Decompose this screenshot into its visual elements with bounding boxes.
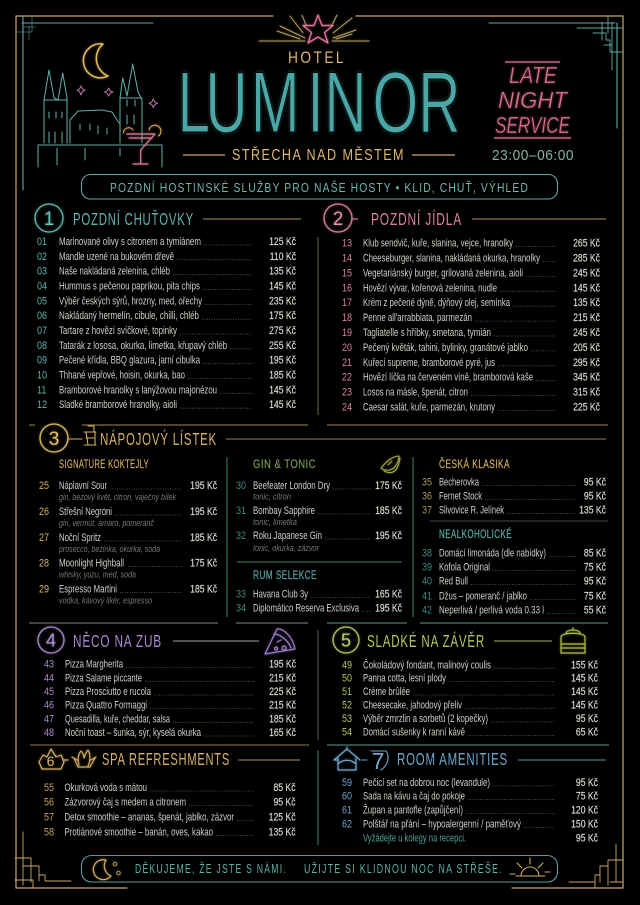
menu list: Župan a pantofle (zapůjčení): [363, 804, 463, 817]
column: czech classics and soft drinks: 41: [422, 591, 432, 603]
menu list: 145 Kč: [269, 281, 296, 293]
menu list: Čokoládový fondant, malinový coulis: [363, 658, 491, 671]
menu list: Výběr českých sýrů, hrozny, med, ořechy: [59, 295, 202, 307]
title: Luminor: LUMINOR: [177, 54, 460, 151]
menu list: Hovězí vývar, kořenová zelenina, nudle: [363, 282, 497, 294]
menu list: 47: [44, 714, 54, 726]
menu list: Hummus s pečenou paprikou, pita chips: [59, 280, 200, 292]
heading: POZDNÍ JÍDLA: [371, 209, 462, 229]
menu list: Naše nakládaná zelenina, chléb: [59, 266, 170, 278]
menu list: [342, 238, 600, 414]
subheading: ČESKÁ KLASIKA: [439, 456, 510, 471]
menu list: Kuřecí supreme, bramborové pyré, jus: [363, 357, 495, 369]
heading: ROOM AMENITIES: [397, 749, 508, 769]
menu list: 215 Kč: [573, 312, 600, 324]
menu list: [44, 659, 296, 739]
section number 5: [333, 627, 359, 653]
column: gin and rum: tonic, limetka: [253, 516, 297, 527]
menu list: 195 Kč: [269, 659, 296, 671]
menu list: Pečicí set na dobrou noc (levandule): [363, 777, 490, 789]
column: gin and rum: 195 Kč: [375, 603, 402, 615]
column: gin and rum: 30: [236, 480, 246, 492]
menu list: 275 Kč: [269, 325, 296, 337]
column: czech classics and soft drinks: 95 Kč: [584, 477, 606, 489]
menu list: 85 Kč: [273, 782, 296, 794]
late night service sign: SERVICE: [495, 112, 570, 138]
icon: house: [334, 747, 360, 770]
menu list: 175 Kč: [269, 310, 296, 323]
menu list: 19: [342, 327, 352, 339]
footer banner: UŽIJTE SI KLIDNOU NOC NA STŘEŠE.: [304, 861, 503, 876]
column: signature cocktails: vodka, kávový likér, espresso: [59, 594, 152, 606]
title: hotel: HOTEL: [288, 48, 346, 67]
late night service sign: LATE: [509, 62, 558, 88]
menu list: 145 Kč: [573, 282, 600, 295]
menu list: 02: [37, 251, 47, 263]
menu list: 11: [37, 385, 47, 397]
menu list: Polštář na přání – hypoalergenní / paměťový: [363, 819, 521, 831]
icon: pizza slice: [265, 629, 295, 654]
menu list: 155 Kč: [571, 659, 598, 672]
heading: SPA REFRESHMENTS: [102, 749, 230, 769]
column: gin and rum: 33: [236, 589, 246, 601]
column: czech classics and soft drinks: 35: [422, 477, 432, 489]
menu list: 08: [37, 340, 47, 352]
menu list: Zázvorový čaj s medem a citronem: [64, 797, 186, 809]
column: czech classics and soft drinks: 37: [422, 505, 432, 517]
menu list: 195 Kč: [269, 355, 296, 367]
intro banner: [82, 174, 558, 199]
icon: cocktail: [123, 125, 161, 164]
menu list: Pizza Salame piccante: [65, 672, 142, 684]
heading: NĚCO NA ZUB: [73, 631, 162, 651]
menu list: Sada na kávu a čaj do pokoje: [363, 791, 465, 803]
menu list: 61: [342, 805, 352, 817]
menu list: 62: [342, 819, 352, 831]
menu list: Cheeseburger, slanina, nakládaná okurka, hranolky: [363, 252, 540, 264]
menu list: Sladké bramborové hranolky, aioli: [59, 399, 177, 411]
panel: 5 sladke na zaver: [333, 627, 598, 739]
column: czech classics and soft drinks: 40: [422, 576, 432, 588]
section number 6: [39, 749, 68, 769]
menu list: 03: [37, 266, 47, 278]
column: signature cocktails: gin, vermut, amaro, pomeranč: [59, 517, 154, 528]
column: czech classics and soft drinks: Fernet Stock: [439, 490, 482, 502]
column: gin and rum: 175 Kč: [375, 480, 402, 492]
menu list: 44: [44, 673, 54, 685]
column: gin and rum: [236, 456, 402, 615]
panel: 4 neco na zub: [38, 627, 296, 739]
icon: lotus: [72, 750, 96, 767]
menu list: 17: [342, 297, 352, 309]
menu list: Noční toast – šunka, sýr, kyselá okurka: [65, 727, 201, 739]
menu list: 95 Kč: [273, 797, 296, 809]
menu list: Mandle uzené na bukovém dřevě: [59, 251, 174, 263]
late night service sign: [494, 62, 571, 138]
icon: neon star with rays: [259, 15, 369, 43]
column: gin and rum: 165 Kč: [375, 589, 402, 601]
column: gin and rum: 195 Kč: [375, 530, 402, 542]
menu list: 185 Kč: [269, 713, 296, 726]
menu list: 05: [37, 296, 47, 308]
menu list: 145 Kč: [269, 384, 296, 397]
menu list: 75 Kč: [576, 791, 598, 803]
menu list: 265 Kč: [573, 238, 600, 250]
menu list: 57: [44, 812, 54, 824]
panel: 3 napojovy listek: [39, 424, 608, 617]
menu list: 43: [44, 659, 54, 671]
menu list: 225 Kč: [573, 402, 600, 414]
column: signature cocktails: [39, 457, 217, 606]
icon: lemon: [381, 456, 400, 473]
menu list: 235 Kč: [269, 295, 296, 308]
menu list: 95 Kč: [576, 832, 598, 845]
menu list: [342, 777, 598, 845]
menu list: 245 Kč: [573, 327, 600, 339]
menu list: Krém z pečené dýně, dýňový olej, semínka: [363, 297, 510, 309]
section number 4: [38, 627, 64, 653]
menu list: 145 Kč: [269, 399, 296, 412]
menu list: 12: [37, 399, 47, 411]
column: czech classics and soft drinks: [422, 456, 608, 617]
menu list: Klub sendvič, kuře, slanina, vejce, hranolky: [363, 238, 513, 250]
menu list: 04: [37, 281, 47, 293]
section number 1: [35, 204, 63, 232]
icon: city skyline with moon and cocktail: [38, 44, 162, 167]
section number 3: 3: [49, 429, 59, 450]
column: czech classics and soft drinks: 75 Kč: [584, 591, 606, 603]
menu list: 13: [342, 238, 352, 250]
section number 6: 6: [47, 753, 55, 769]
column: signature cocktails: whisky, yuzu, med, soda: [59, 568, 136, 580]
menu list: 215 Kč: [269, 672, 296, 685]
menu list: 165 Kč: [269, 727, 296, 739]
menu list: [44, 782, 296, 839]
menu list: 16: [342, 283, 352, 295]
menu list: 215 Kč: [269, 700, 296, 712]
menu list: 150 Kč: [571, 819, 598, 831]
column: signature cocktails: Noční Spritz: [59, 532, 101, 544]
menu list: 07: [37, 325, 47, 337]
column: czech classics and soft drinks: Slivovice R. Jelínek: [439, 504, 504, 516]
heading: POZDNÍ CHUŤOVKY: [73, 209, 194, 229]
menu list: 65 Kč: [576, 727, 598, 739]
menu list: 95 Kč: [576, 713, 598, 725]
menu list: Panna cotta, lesní plody: [363, 673, 446, 685]
column: czech classics and soft drinks: 75 Kč: [584, 562, 606, 574]
icon: moon and stars: [93, 860, 120, 880]
column: signature cocktails: gin, bezový květ, citron, vaječný bílek: [59, 491, 177, 502]
menu list: Bramborové hranolky s lanýžovou majonézou: [59, 384, 217, 396]
menu list: 10: [37, 370, 47, 382]
menu list: 49: [342, 660, 352, 672]
menu list: 48: [44, 727, 54, 739]
column: czech classics and soft drinks: Domácí limonáda (dle nabídky): [439, 548, 546, 560]
menu list: 01: [37, 236, 47, 248]
menu list: 135 Kč: [573, 297, 600, 310]
section number 7: 7: [372, 748, 384, 774]
menu list: Pizza Quattro Formaggi: [65, 700, 147, 712]
column: gin and rum: tonic, okurka, zázvor: [253, 542, 320, 553]
column: czech classics and soft drinks: Becherovka: [439, 476, 479, 488]
menu list: [37, 236, 296, 412]
column: signature cocktails: 175 Kč: [190, 558, 217, 570]
menu list: Okurková voda s mátou: [64, 782, 147, 794]
icon: sun on horizon: [510, 858, 550, 876]
menu list: Detox smoothie – ananas, špenát, jablko, zázvor: [64, 812, 234, 824]
menu list: 21: [342, 357, 352, 369]
column: czech classics and soft drinks: Neperlivá / perlivá voda 0.33 l: [439, 604, 544, 616]
menu list: 285 Kč: [573, 253, 600, 265]
menu list: Hovězí líčka na červeném víně, bramborová kaše: [363, 372, 533, 384]
column: czech classics and soft drinks: Kofola Original: [439, 562, 490, 574]
column: signature cocktails: 28: [39, 558, 49, 570]
menu list: Penne all'arrabbiata, parmezán: [363, 312, 472, 324]
menu list: 50: [342, 673, 352, 685]
column: gin and rum: Beefeater London Dry: [253, 480, 330, 492]
menu list: 110 Kč: [270, 251, 296, 263]
menu list: Marinované olivy s citronem a tymiánem: [59, 236, 201, 248]
menu list: 255 Kč: [269, 340, 296, 352]
menu list: 51: [342, 686, 352, 698]
menu list: Nakládaný hermelín, cibule, chilli, chléb: [59, 310, 199, 322]
subheading: NEALKOHOLICKÉ: [439, 526, 512, 541]
section number 2: [324, 204, 358, 232]
column: signature cocktails: Moonlight Highball: [59, 558, 124, 570]
menu list: 135 Kč: [269, 266, 296, 278]
menu list: Cheesecake, jahodový přeliv: [363, 699, 462, 711]
menu list: Pečený květák, tahini, bylinky, granátové jablko: [363, 342, 528, 354]
column: signature cocktails: Espresso Martini: [59, 584, 117, 596]
menu list: Losos na másle, špenát, citron: [363, 387, 468, 399]
column: gin and rum: Roku Japanese Gin: [253, 530, 322, 542]
footer banner: DĚKUJEME, ŽE JSTE S NÁMI.: [135, 861, 287, 876]
menu list: 54: [342, 727, 352, 739]
subheading: RUM SELEKCE: [253, 568, 317, 582]
menu list: 23: [342, 387, 352, 399]
column: signature cocktails: Náplavní Sour: [59, 480, 107, 492]
menu list: 15: [342, 268, 352, 280]
panel: 1 pozdni chutovky: [35, 204, 301, 412]
column: czech classics and soft drinks: 39: [422, 562, 432, 574]
menu list: Tatarák z lososa, okurka, limetka, křupavý chléb: [59, 340, 227, 352]
section number 2: 2: [333, 209, 343, 230]
menu list: Tagliatelle s hříbky, smetana, tymián: [363, 327, 491, 339]
column: gin and rum: 31: [236, 505, 246, 517]
section number 4: 4: [46, 630, 56, 650]
icon: cake: [561, 628, 585, 653]
section number 1: 1: [44, 209, 54, 230]
menu list: 345 Kč: [573, 372, 600, 384]
menu list: 20: [342, 342, 352, 354]
menu list: Protiánové smoothie – banán, oves, kakao: [64, 827, 213, 839]
column: signature cocktails: 185 Kč: [190, 532, 217, 544]
column: gin and rum: 34: [236, 603, 246, 615]
section number 7: [362, 748, 388, 774]
menu list: [342, 658, 598, 739]
menu list: 56: [44, 797, 54, 809]
icon: skyline: [38, 64, 162, 167]
menu list: 205 Kč: [573, 342, 600, 354]
menu list: 245 Kč: [573, 268, 600, 280]
subheading: SIGNATURE KOKTEJLY: [59, 457, 149, 471]
footer banner: [82, 856, 558, 882]
menu list: Pizza Margherita: [65, 659, 123, 671]
column: signature cocktails: 27: [39, 532, 49, 544]
menu list: 24: [342, 402, 352, 414]
menu list: 135 Kč: [269, 827, 296, 839]
note: Vyžádejte u kolegy na recepci.: [363, 832, 466, 844]
menu list: Domácí sušenky k ranní kávě: [363, 727, 465, 739]
menu list: 125 Kč: [269, 812, 296, 824]
menu list: 145 Kč: [571, 699, 598, 712]
menu list: Tartare z hovězí svíčkové, topinky: [59, 325, 177, 337]
column: signature cocktails: 29: [39, 584, 49, 596]
menu list: 120 Kč: [571, 805, 598, 817]
column: czech classics and soft drinks: 135 Kč: [579, 505, 606, 517]
menu list: 185 Kč: [269, 370, 296, 382]
menu list: 145 Kč: [571, 673, 598, 685]
panel: 7 room amenities: [334, 747, 606, 845]
service hours: 23:00–06:00: [492, 147, 574, 164]
column: czech classics and soft drinks: 42: [422, 605, 432, 617]
heading: SLADKÉ NA ZÁVĚR: [367, 631, 485, 651]
menu list: 45: [44, 686, 54, 698]
menu list: 22: [342, 372, 352, 384]
column: czech classics and soft drinks: 38: [422, 548, 432, 560]
menu list: 53: [342, 713, 352, 725]
menu list: Crème brûlée: [363, 686, 410, 698]
column: gin and rum: 185 Kč: [375, 505, 402, 517]
menu list: 145 Kč: [571, 686, 598, 698]
menu list: 14: [342, 253, 352, 265]
icon: drink glass: [68, 426, 96, 445]
menu list: Thhané vepřové, hoisin, okurka, bao: [59, 370, 185, 382]
menu list: 18: [342, 312, 352, 324]
icon: moon: [83, 44, 108, 78]
panel: 2 pozdni jidla: [324, 204, 606, 414]
panel: 6 spa refreshments: [39, 749, 300, 839]
column: czech classics and soft drinks: 95 Kč: [584, 491, 606, 503]
menu list: 315 Kč: [573, 387, 600, 399]
menu list: 295 Kč: [573, 357, 600, 369]
column: czech classics and soft drinks: 95 Kč: [584, 576, 606, 588]
column: gin and rum: Bombay Sapphire: [253, 505, 315, 517]
column: signature cocktails: 26: [39, 506, 49, 518]
icon: small stars: [77, 86, 158, 108]
column: gin and rum: Diplomático Reserva Exclusiva: [253, 602, 359, 614]
menu list: 46: [44, 700, 54, 712]
menu list: 225 Kč: [269, 686, 296, 698]
column: czech classics and soft drinks: 55 Kč: [584, 605, 606, 617]
menu list: 58: [44, 827, 54, 839]
menu list: 59: [342, 777, 352, 789]
column: signature cocktails: 195 Kč: [190, 506, 217, 518]
column: signature cocktails: 195 Kč: [190, 480, 217, 492]
section number 5: 5: [341, 630, 351, 650]
intro banner: POZDNÍ HOSTINSKÉ SLUŽBY PRO NAŠE HOSTY • KLID, CHUŤ, VÝHLED: [110, 180, 529, 195]
menu list: Caesar salát, kuře, parmezán, krutony: [363, 402, 495, 414]
menu list: 125 Kč: [269, 236, 296, 248]
menu list: 60: [342, 791, 352, 803]
menu list: 06: [37, 310, 47, 322]
menu list: 09: [37, 355, 47, 367]
column: gin and rum: 32: [236, 530, 246, 542]
column: signature cocktails: 185 Kč: [190, 584, 217, 596]
column: gin and rum: tonic, citron: [253, 490, 291, 502]
menu list: Výběr zmrzlin a sorbetů (2 kopečky): [363, 713, 488, 725]
menu list: Quesadilla, kuře, cheddar, salsa: [65, 713, 170, 725]
menu list: Vegetariánský burger, grilovaná zelenina, aioli: [363, 267, 523, 279]
late night service sign: NIGHT: [498, 87, 569, 113]
subtitle: rooftop: STŘECHA NAD MĚSTEM: [232, 147, 405, 164]
column: czech classics and soft drinks: Džus – pomeranč / jablko: [439, 590, 527, 602]
column: signature cocktails: prosecco, bezinka, okurka, soda: [58, 543, 160, 554]
menu list: Pečené křídla, BBQ glazura, jarní cibulka: [59, 355, 200, 367]
heading: NÁPOJOVÝ LÍSTEK: [100, 429, 217, 449]
menu list: 55: [44, 782, 54, 794]
section number 3: [40, 424, 68, 452]
column: signature cocktails: Střešní Negroni: [59, 506, 112, 518]
column: czech classics and soft drinks: 36: [422, 491, 432, 503]
menu list: Pizza Prosciutto e rucola: [65, 686, 151, 698]
column: signature cocktails: 25: [39, 480, 49, 492]
menu list: 52: [342, 700, 352, 712]
subheading: GIN & TONIC: [253, 457, 316, 471]
column: czech classics and soft drinks: Red Bull: [439, 576, 468, 588]
menu list: 95 Kč: [576, 777, 598, 789]
column: gin and rum: Havana Club 3y: [253, 588, 308, 600]
column: czech classics and soft drinks: 85 Kč: [584, 548, 606, 560]
